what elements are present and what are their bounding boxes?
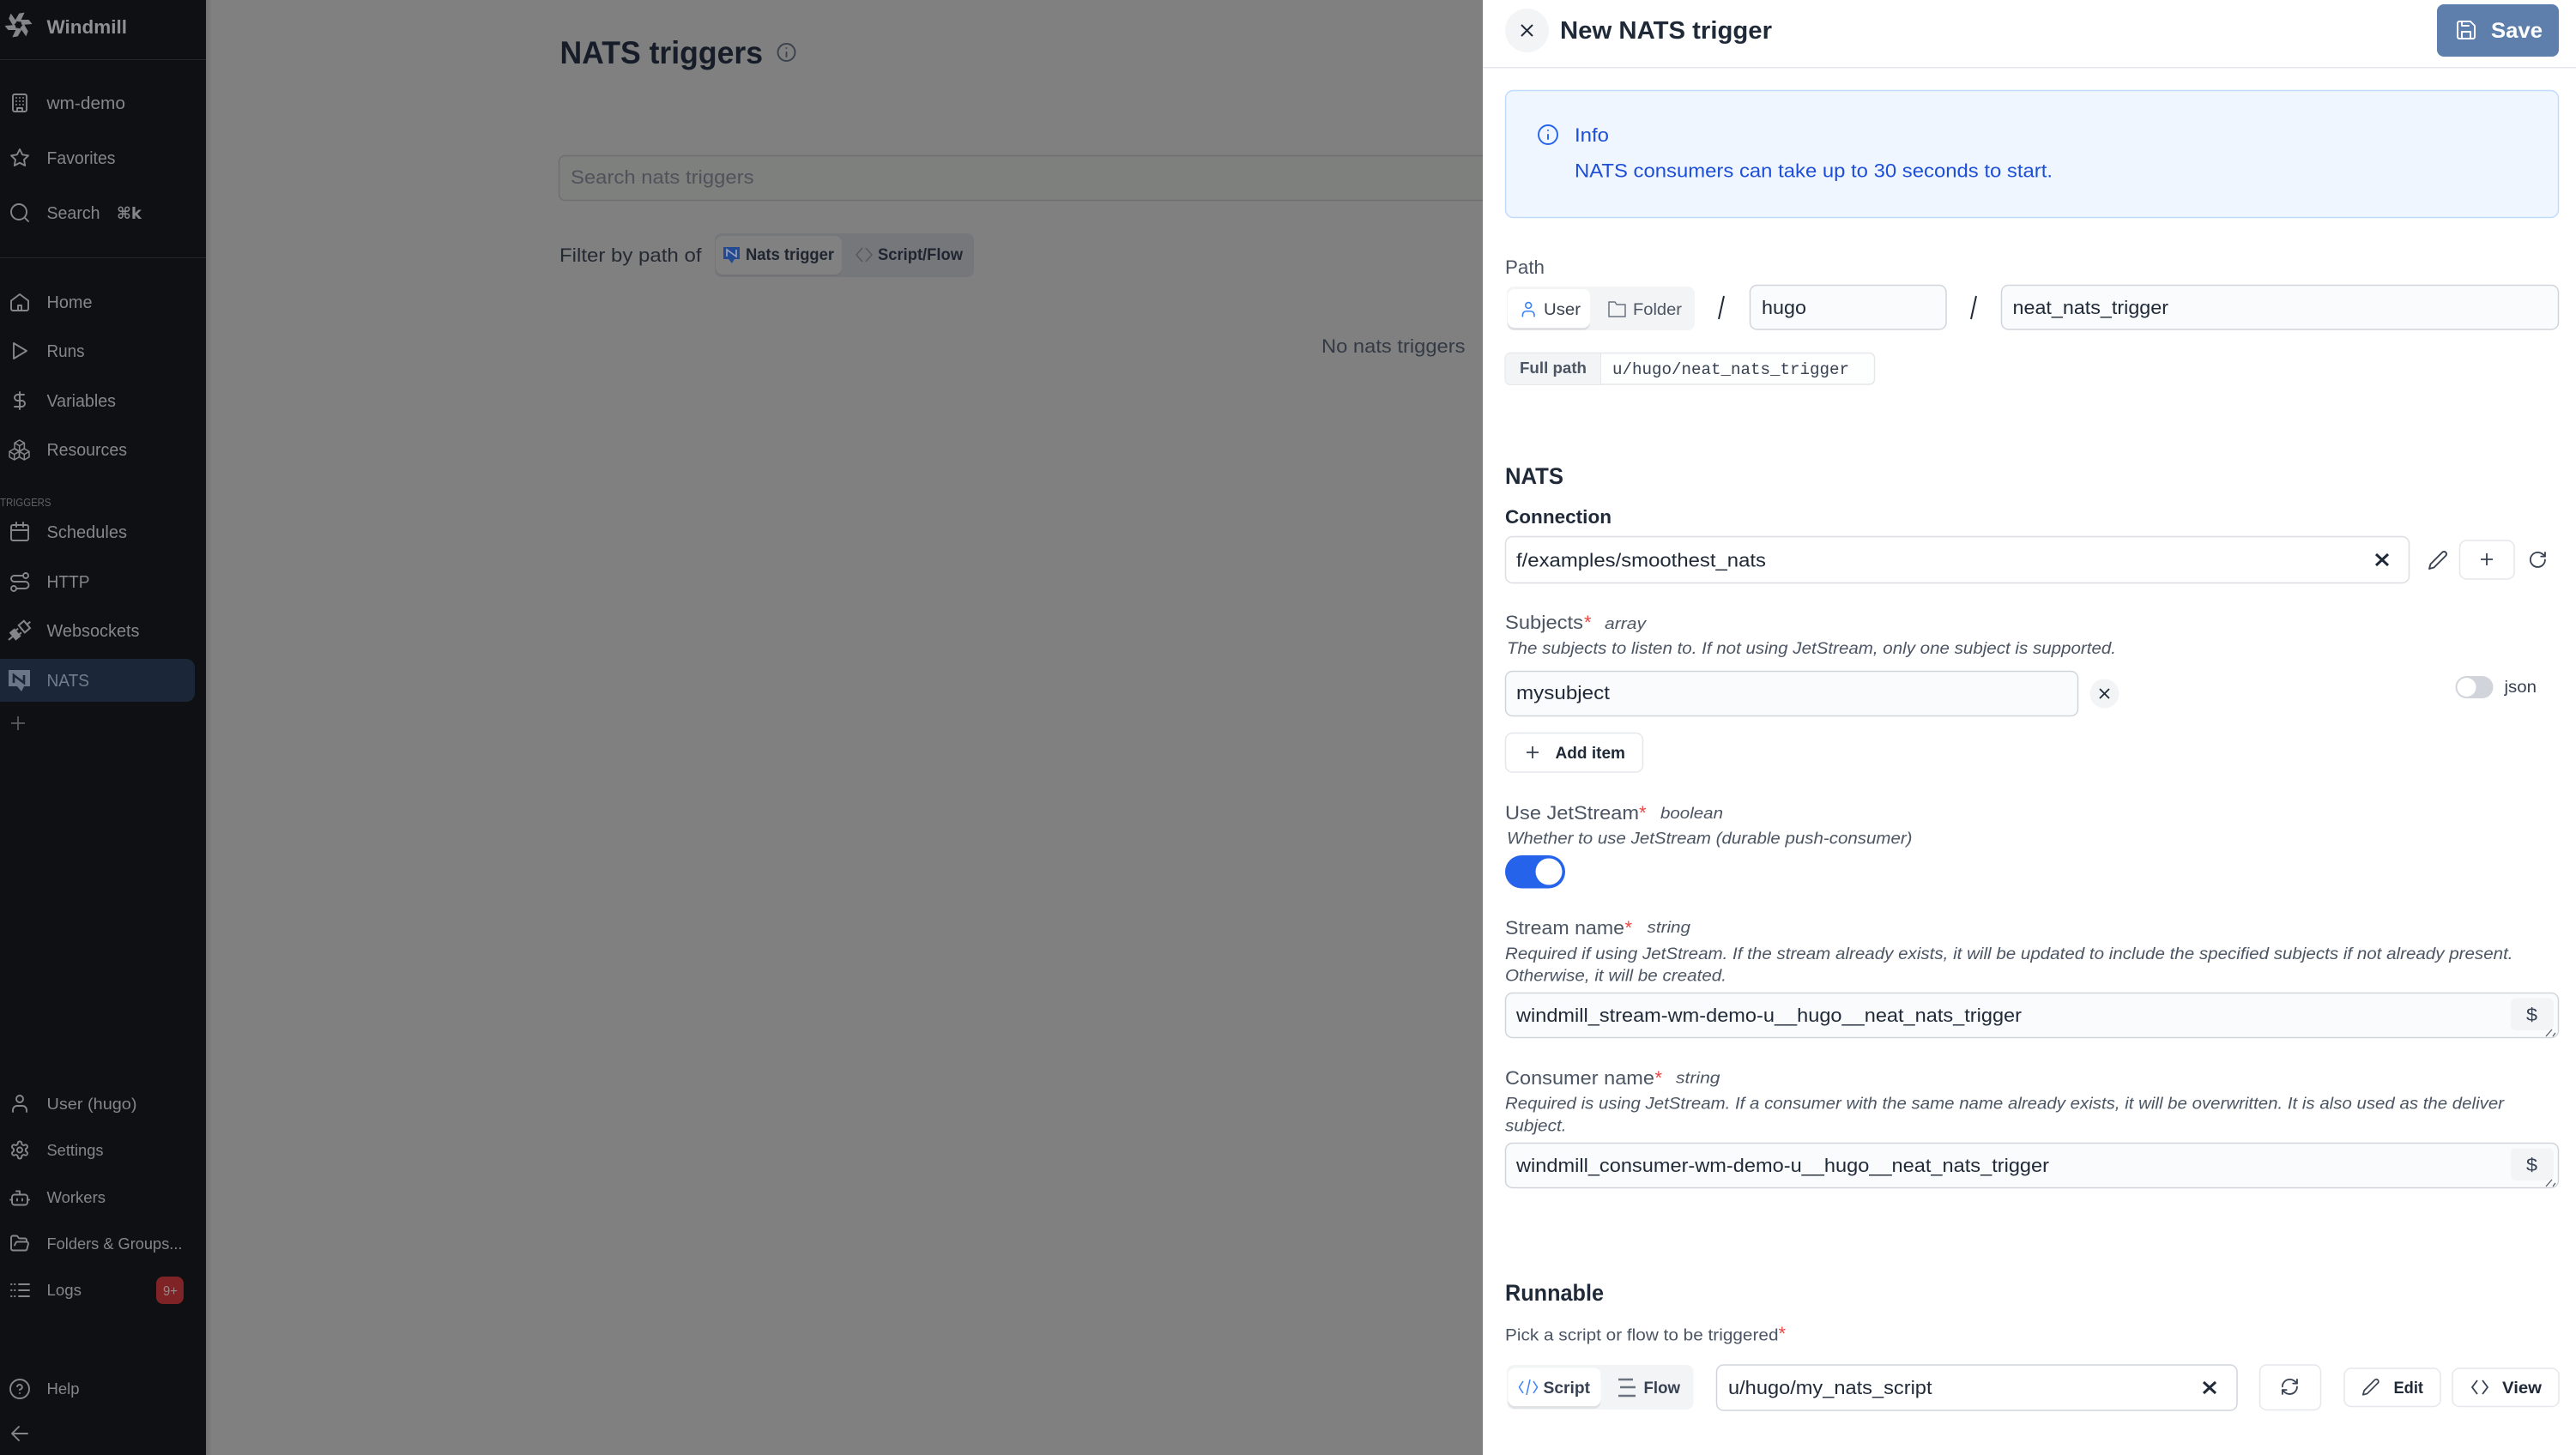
subjects field: *: [1584, 612, 1592, 633]
owner toggle: Folder: [1633, 301, 1683, 319]
nav item: schedules: Schedules: [46, 523, 127, 542]
owner toggle: [1507, 287, 1695, 330]
nav item: schedules: [11, 522, 127, 542]
connection field: Connection: [1505, 506, 1612, 528]
nav item: logs: [11, 1277, 184, 1304]
json toggle: [2456, 676, 2537, 698]
remove item button: [2090, 679, 2119, 709]
full path: [1505, 353, 1874, 384]
use jetstream field: boolean: [1660, 805, 1723, 822]
nav item: logs: Logs: [46, 1281, 82, 1299]
empty state message: No nats triggers: [1321, 335, 1466, 357]
edit button: Edit: [2394, 1380, 2424, 1398]
runnable section heading: Runnable: [1505, 1280, 1604, 1306]
icon: refresh: [2531, 552, 2545, 567]
stream name field: Stream name: [1505, 917, 1624, 939]
section label: triggers: TRIGGERS: [0, 496, 51, 509]
nav item: workers: Workers: [46, 1188, 106, 1206]
subjects field: array: [1605, 615, 1647, 632]
info callout: NATS consumers can take up to 30 seconds to start.: [1575, 160, 2053, 182]
variable button: [2511, 999, 2555, 1036]
path section: Path: [1505, 257, 1545, 278]
edit button: [2344, 1368, 2440, 1407]
input: trigger name: [2001, 285, 2559, 329]
nav item: favorites: [11, 149, 115, 168]
info callout: [1505, 91, 2559, 218]
consumer name field: [1505, 1067, 2559, 1187]
drawer header: New NATS trigger: [1560, 17, 1772, 45]
nav item: user: [13, 1095, 137, 1113]
sidebar: [0, 0, 212, 1455]
nav item: websockets: [5, 619, 140, 643]
nav item: folders and groups: Folders & Groups...: [46, 1235, 182, 1253]
nav item: home: [11, 293, 93, 312]
runnable picker: *: [1778, 1323, 1787, 1344]
nav item: websockets: Websockets: [46, 622, 139, 641]
icon: add trigger plus: [11, 716, 25, 730]
nav item: help: [10, 1380, 79, 1398]
full path: u/hugo/neat_nats_trigger: [1612, 360, 1849, 379]
script/flow toggle: Flow: [1644, 1380, 1680, 1398]
drawer header: [1483, 9, 2576, 69]
connection field: [1505, 506, 2545, 583]
use jetstream field: Whether to use JetStream (durable push-consumer): [1507, 830, 1912, 848]
nav item: nats (active): NATS: [46, 672, 89, 691]
add button: [2459, 540, 2514, 579]
consumer name field: *: [1654, 1067, 1663, 1089]
search box: Search nats triggers: [571, 166, 753, 188]
full path: Full path: [1520, 359, 1587, 377]
stream name field: Otherwise, it will be created.: [1505, 968, 1726, 985]
use jetstream field: *: [1639, 802, 1647, 824]
nav item: resources: [9, 440, 127, 460]
input: trigger name: neat_nats_trigger: [2013, 297, 2168, 318]
nav item: home: Home: [46, 293, 93, 312]
script/flow toggle: [1507, 1365, 1694, 1410]
nav item: variables: [15, 392, 116, 411]
stream name field: [1505, 917, 2559, 1038]
variable button: [2511, 1148, 2555, 1186]
stream name field: windmill_stream-wm-demo-u__hugo__neat_nats_trigger: [1515, 1005, 2022, 1026]
toggle group: Nats trigger: [746, 246, 835, 264]
input: hugo: hugo: [1762, 297, 1806, 318]
nav item: settings: Settings: [46, 1141, 103, 1159]
sidebar brand name: Windmill: [46, 16, 127, 38]
owner toggle: User: [1544, 301, 1581, 319]
nav item: wm-demo: [13, 94, 125, 113]
add item button: Add item: [1555, 745, 1625, 763]
view button: View: [2502, 1380, 2542, 1398]
nav item: wm-demo: wm-demo: [45, 94, 125, 113]
nav item: http: [11, 573, 89, 592]
runnable picker: Pick a script or flow to be triggered: [1505, 1326, 1778, 1345]
stream name field: Required if using JetStream. If the stream already exists, it will be updated to include the specified subjects if not already present.: [1505, 945, 2513, 963]
stream name field: string: [1648, 919, 1690, 936]
info callout: Info: [1575, 124, 1609, 146]
subjects field: Subjects: [1505, 612, 1583, 633]
nav item: settings: [12, 1141, 104, 1159]
nav item: workers: [10, 1188, 106, 1206]
icon: clear: [2376, 554, 2388, 565]
nav item: runs: [14, 342, 84, 361]
filter by path: [559, 233, 974, 277]
consumer name field: subject.: [1505, 1117, 1567, 1136]
icon: info: [777, 44, 795, 61]
nats section heading: NATS: [1505, 463, 1563, 489]
subjects field: The subjects to listen to. If not using JetStream, only one subject is supported.: [1507, 640, 2116, 658]
icon: windmill logo: [5, 10, 33, 39]
save button: Save: [2491, 19, 2543, 43]
input: runnable path: [1716, 1365, 2237, 1410]
drawer panel: [1483, 0, 2576, 1455]
page heading: NATS triggers: [559, 35, 763, 70]
input: runnable path: u/hugo/my_nats_script: [1728, 1377, 1932, 1398]
variable button: $: [2526, 1005, 2537, 1025]
nav item: search: ⌘k: [117, 204, 142, 223]
stream name field: *: [1625, 917, 1632, 939]
toggle group: [715, 233, 974, 277]
save button: [2437, 4, 2559, 57]
filter by path: Filter by path of: [559, 245, 702, 266]
subjects field: [1505, 612, 2537, 772]
consumer name field: Required is using JetStream. If a consumer with the same name already exists, it will be overwritten. It is also used as the deliver: [1505, 1095, 2505, 1114]
refresh button: [2260, 1365, 2320, 1410]
nav item: resources: Resources: [46, 441, 127, 460]
use jetstream field: [1505, 802, 1912, 889]
nav item: user: User (hugo): [46, 1095, 137, 1113]
use jetstream field: Use JetStream: [1505, 802, 1639, 824]
subjects field: mysubject: [1516, 682, 1610, 703]
nav item: search: Search: [46, 204, 100, 223]
path section: [1505, 257, 2559, 384]
nav item: logs: 9+: [163, 1284, 178, 1299]
toggle group: Script/Flow: [878, 246, 963, 264]
consumer name field: Consumer name: [1505, 1067, 1654, 1089]
search box: [559, 156, 1503, 201]
nav item: favorites: Favorites: [46, 149, 115, 168]
icon: collapse sidebar arrow: [12, 1427, 27, 1440]
icon: info: [1539, 125, 1557, 144]
nav item: search: [11, 204, 142, 223]
connection field: f/examples/smoothest_nats: [1516, 549, 1766, 571]
script/flow toggle: Script: [1543, 1380, 1591, 1398]
json toggle: json: [2503, 679, 2537, 697]
add item button: [1505, 733, 1642, 772]
variable button: $: [2526, 1156, 2537, 1175]
nav item: help: Help: [46, 1380, 79, 1398]
runnable picker: [1505, 1323, 2559, 1410]
nav item: http: HTTP: [46, 573, 89, 592]
consumer name field: windmill_consumer-wm-demo-u__hugo__neat_nats_trigger: [1515, 1155, 2049, 1176]
input: hugo: [1751, 285, 1946, 329]
view button: [2452, 1368, 2559, 1407]
nav item: nats (active): [0, 659, 195, 702]
nav item: runs: Runs: [46, 342, 84, 361]
nav item: variables: Variables: [46, 392, 116, 411]
icon: edit pencil: [2429, 552, 2446, 569]
consumer name field: string: [1676, 1069, 1720, 1086]
